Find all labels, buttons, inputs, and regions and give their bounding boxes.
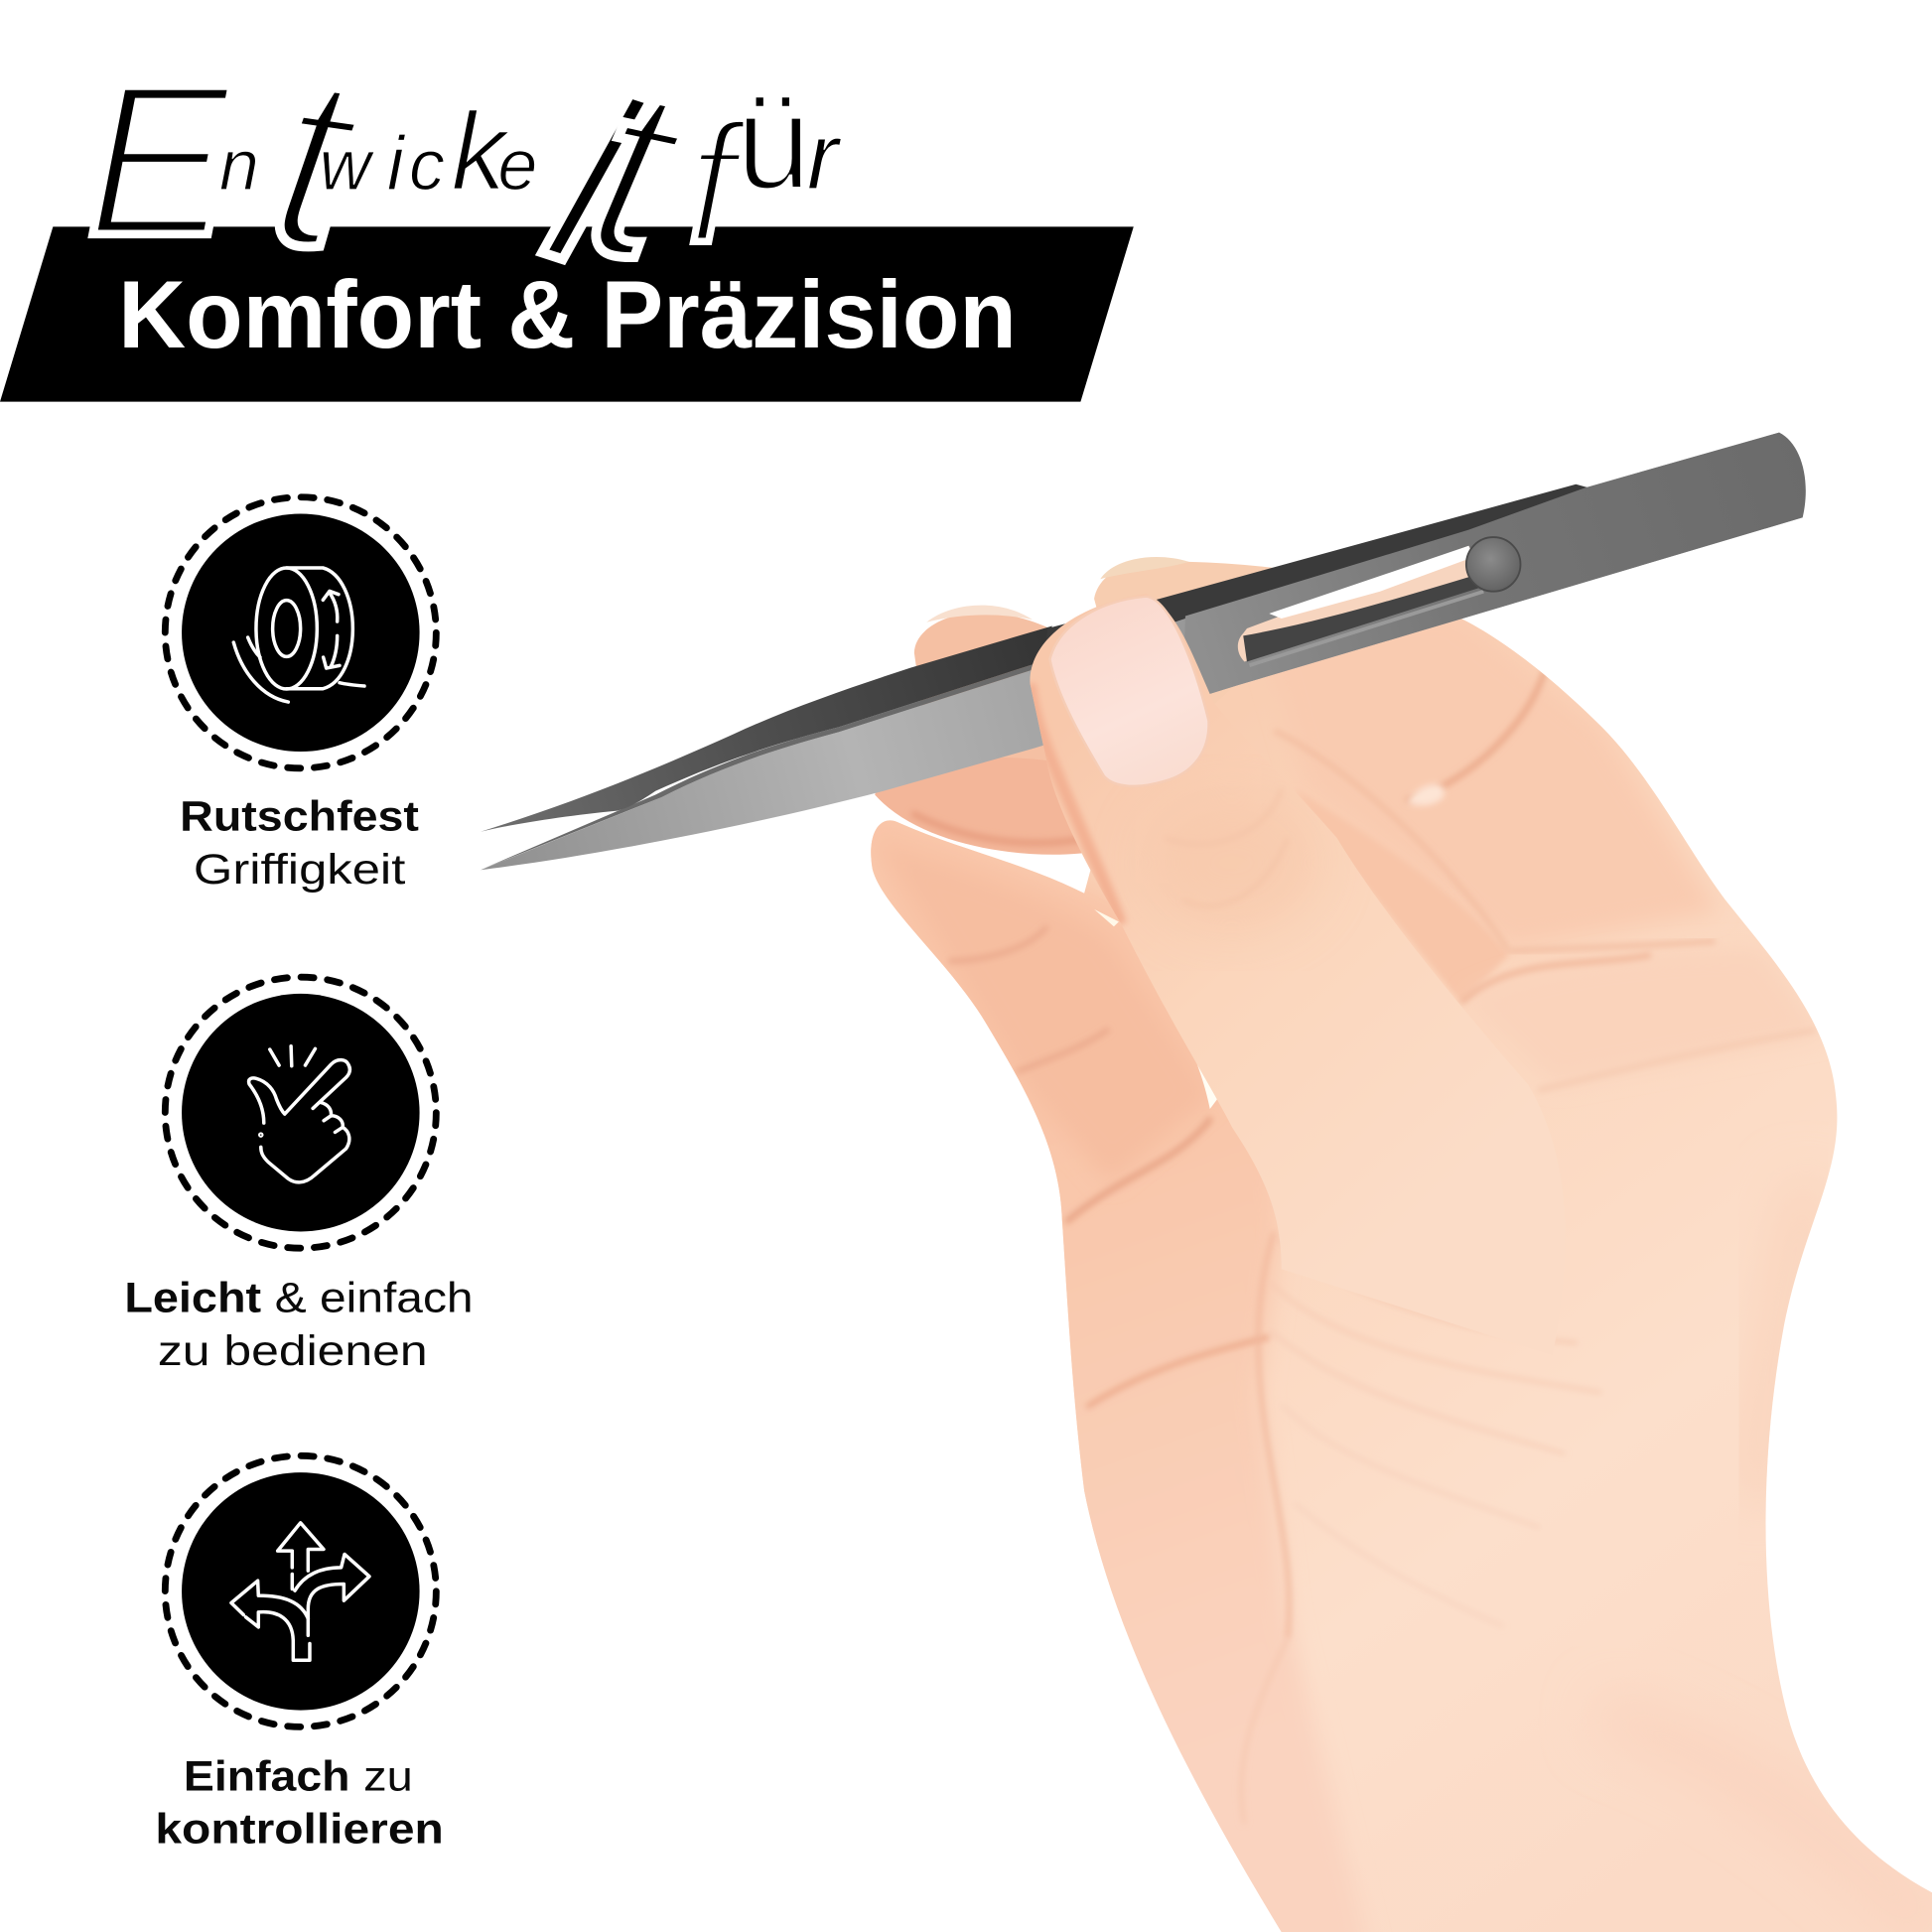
dashed ring 2 bbox=[165, 977, 436, 1248]
thumb with nail bbox=[1030, 594, 1566, 1355]
gaps between fingers bbox=[1166, 996, 1217, 1109]
label: Leicht und einfach zu bedienen: Leicht bbox=[124, 1275, 261, 1321]
script heading: ü bbox=[736, 66, 811, 217]
script heading: r bbox=[807, 104, 842, 208]
rivet bbox=[1466, 537, 1520, 592]
label: Einfach zu kontrollieren: zu bbox=[363, 1752, 413, 1799]
tweezers bbox=[481, 433, 1806, 870]
icon: finger snap hand bbox=[182, 994, 420, 1231]
script heading: l bbox=[522, 39, 665, 320]
label: Rutschfest Griffigkeit: Rutschfest bbox=[180, 792, 419, 839]
label: Einfach zu kontrollieren: kontrollieren bbox=[155, 1806, 444, 1853]
feature: Einfach zu kontrollieren bbox=[155, 1455, 444, 1853]
script heading: k bbox=[451, 89, 511, 213]
script heading: f bbox=[640, 88, 751, 278]
wrinkles bbox=[1393, 1305, 1575, 1344]
dashed ring 3 bbox=[165, 1455, 436, 1726]
feature: Leicht und einfach bbox=[124, 977, 474, 1374]
lower light blade bbox=[481, 433, 1803, 870]
feature: Rutschfest bbox=[165, 497, 436, 893]
script heading: c bbox=[409, 126, 445, 206]
script heading: E bbox=[86, 40, 232, 281]
label: Leicht und einfach zu bedienen: zu bedienen bbox=[158, 1327, 428, 1374]
script heading: e bbox=[497, 126, 537, 206]
script heading: t bbox=[571, 28, 704, 314]
far finger behind tweezers bbox=[1094, 560, 1478, 740]
thumbnail bbox=[1049, 597, 1209, 786]
slot window bbox=[1238, 546, 1486, 661]
script heading: n bbox=[219, 126, 259, 206]
hand: palm and wrist bbox=[838, 610, 1932, 1932]
script heading: i bbox=[387, 121, 406, 207]
index fingertip bbox=[914, 613, 1084, 788]
middle fingertip bbox=[875, 758, 1103, 855]
label: Einfach zu kontrollieren: Einfach bbox=[184, 1752, 349, 1799]
icon: tape roll bbox=[182, 514, 420, 752]
script heading: t bbox=[259, 18, 374, 302]
script heading: w bbox=[319, 126, 374, 206]
upper dark blade bbox=[481, 625, 1052, 832]
dashed ring 1 bbox=[165, 497, 436, 768]
hand holding the tweezers (back fingers) bbox=[875, 557, 1478, 855]
label: Leicht und einfach zu bedienen: & einfach bbox=[275, 1275, 474, 1321]
banner heading: Komfort & Präzision bbox=[118, 260, 1017, 368]
palm side shading bbox=[871, 820, 1350, 1932]
banner bbox=[0, 226, 1134, 402]
handle plate bbox=[1182, 433, 1806, 702]
icon: three way arrows bbox=[182, 1472, 420, 1711]
creases bbox=[1406, 670, 1545, 801]
label: Rutschfest Griffigkeit: Griffigkeit bbox=[194, 846, 406, 893]
